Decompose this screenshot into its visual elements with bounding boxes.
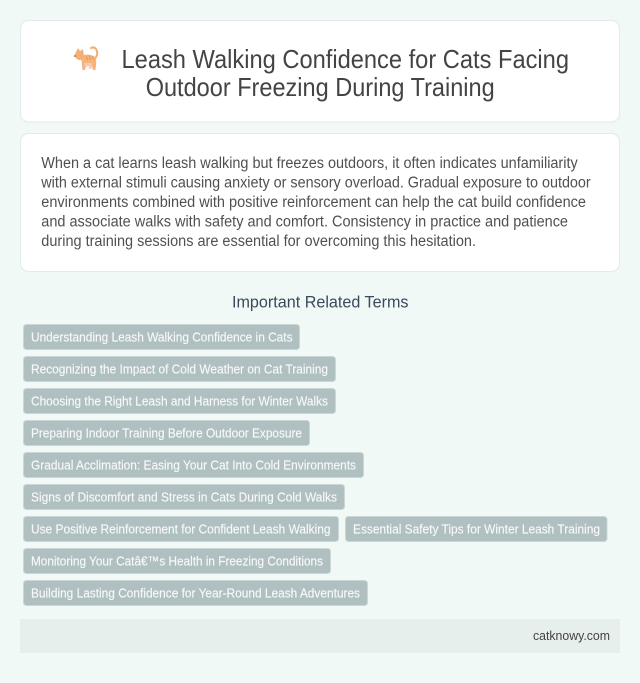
tag: recognizing: Recognizing the Impact of Cold Weather on Cat Training <box>31 362 328 376</box>
title: Leash Walking Confidence for Cats Facing <box>122 44 569 74</box>
tag: safety: Essential Safety Tips for Winter Leash Training <box>353 522 600 536</box>
tag: building <box>24 580 368 606</box>
footer: catknowy.com <box>533 628 610 643</box>
text block: description: during training sessions are essential for overcoming this hesitation. <box>41 233 476 250</box>
tag: building: Building Lasting Confidence for Year-Round Leash Adventures <box>31 586 360 600</box>
footer <box>20 619 620 653</box>
heading: related terms: Important Related Terms <box>232 294 408 312</box>
text block: description: When a cat learns leash walking but freezes outdoors, it often indicates unfamiliarity <box>41 155 578 172</box>
tag: signs: Signs of Discomfort and Stress in Cats During Cold Walks <box>31 490 337 504</box>
tag: recognizing <box>24 356 336 382</box>
tag: understanding: Understanding Leash Walking Confidence in Cats <box>31 330 293 344</box>
tag: preparing <box>24 420 310 446</box>
text block: description: environments combined with positive reinforcement can help the cat build confidence <box>41 194 586 211</box>
tag: choosing <box>24 388 336 414</box>
tag: positive reinforcement <box>24 516 338 542</box>
tag: understanding <box>24 324 300 350</box>
tag: gradual: Gradual Acclimation: Easing Your Cat Into Cold Environments <box>31 458 356 472</box>
tag: choosing: Choosing the Right Leash and Harness for Winter Walks <box>31 394 328 408</box>
tag: monitoring: Monitoring Your Catâ€™s Health in Freezing Conditions <box>31 554 323 568</box>
title: Outdoor Freezing During Training <box>146 72 495 102</box>
title <box>122 44 569 102</box>
panel: description <box>20 134 620 272</box>
tag: monitoring <box>24 548 330 574</box>
panel: title card <box>20 20 620 122</box>
tag: gradual <box>24 452 364 478</box>
tag: safety <box>346 516 607 542</box>
text block: description <box>40 155 591 250</box>
panel: related terms tags <box>24 324 607 606</box>
tag: preparing: Preparing Indoor Training Before Outdoor Exposure <box>31 426 302 440</box>
text block: description: and associate walks with safety and comfort. Consistency in practice and patience <box>41 213 568 230</box>
text block: description: with external stimuli causing anxiety or sensory overload. Gradual exposure to outdoor <box>40 174 591 191</box>
tag: signs <box>24 484 344 510</box>
icon: cat <box>74 47 97 70</box>
tag: positive reinforcement: Use Positive Reinforcement for Confident Leash Walking <box>31 522 330 536</box>
